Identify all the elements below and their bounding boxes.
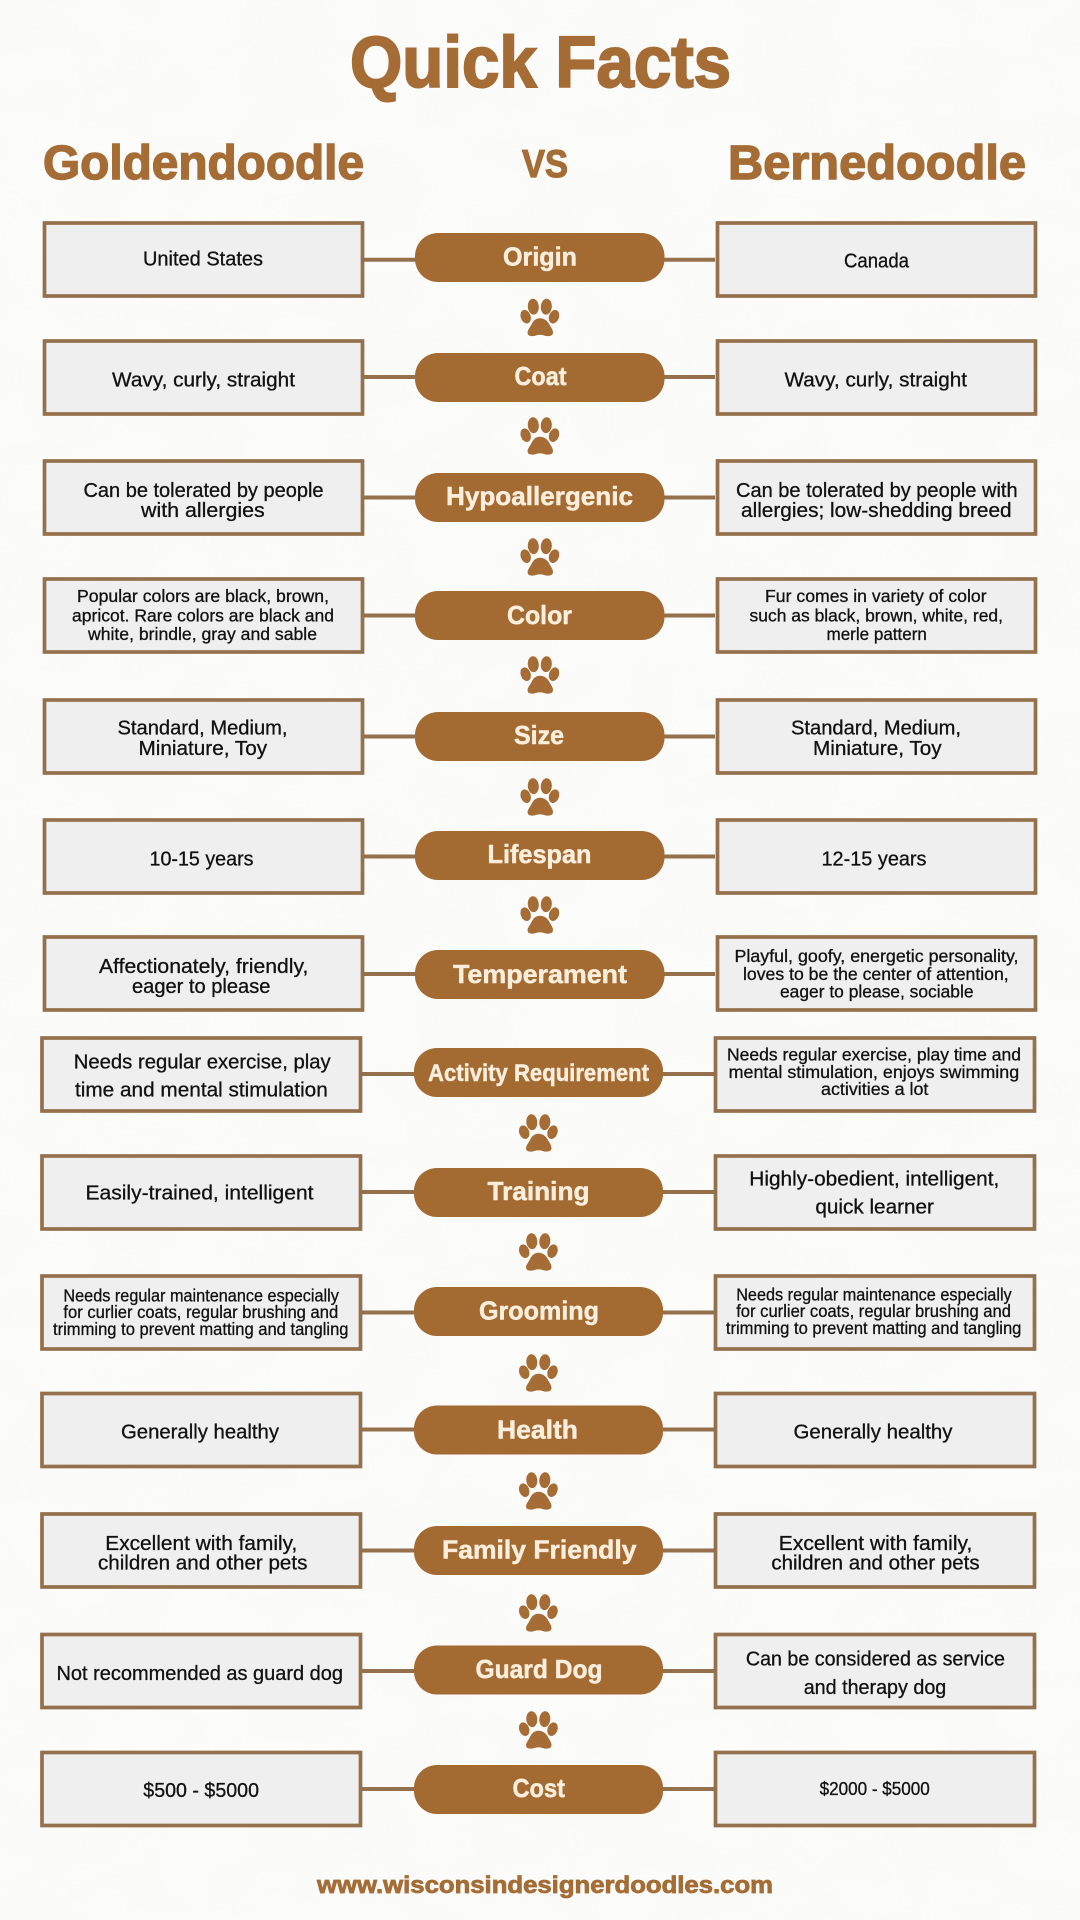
- Coat connectors: [364, 375, 715, 379]
- Health Goldendoodle text: Generally healthy: [121, 1420, 280, 1444]
- Health label: Health: [497, 1414, 578, 1444]
- Guard Bernedoodle text: [746, 1647, 1005, 1699]
- Family Goldendoodle text: [98, 1532, 307, 1574]
- Grooming pill: [414, 1287, 663, 1336]
- row: Training: [42, 1156, 1034, 1229]
- row: Lifespan: [44, 820, 1036, 893]
- Guard connectors: [362, 1669, 714, 1673]
- Color label: Color: [507, 600, 572, 630]
- Temperament Bernedoodle text: [734, 946, 1018, 1002]
- Family Bernedoodle box: [716, 1514, 1034, 1587]
- Size label: Size: [514, 720, 564, 750]
- Grooming Bernedoodle text: Needs regular maintenance especially: [736, 1284, 1012, 1304]
- icon: paw: [517, 1114, 560, 1152]
- icon: paw: [517, 1711, 560, 1749]
- Hypoallergenic Goldendoodle text: Can be tolerated by people: [84, 479, 324, 502]
- Hypoallergenic Bernedoodle text: allergies; low-shedding breed: [741, 499, 1012, 522]
- icon: paw: [517, 1354, 560, 1392]
- Color Goldendoodle box: [44, 579, 362, 652]
- icon: paw: [519, 298, 561, 336]
- row: Cost: [42, 1752, 1034, 1826]
- Training Bernedoodle text: [749, 1168, 999, 1218]
- Grooming Bernedoodle text: [726, 1284, 1021, 1338]
- icon: paw: [519, 417, 561, 455]
- Training connectors: [362, 1190, 714, 1194]
- icon: paw: [517, 1233, 560, 1271]
- Guard Goldendoodle text: Not recommended as guard dog: [56, 1662, 343, 1685]
- Grooming Bernedoodle text: for curlier coats, regular brushing and: [736, 1301, 1011, 1321]
- Grooming Bernedoodle box: [716, 1276, 1034, 1349]
- Size Bernedoodle text: Miniature, Toy: [813, 737, 942, 760]
- Cost label: Cost: [512, 1773, 565, 1803]
- Activity Bernedoodle text: Needs regular exercise, play time and: [727, 1045, 1021, 1065]
- row: Hypoallergenic: [44, 461, 1036, 534]
- Activity Goldendoodle box: [42, 1038, 360, 1111]
- Color Bernedoodle text: [750, 586, 1003, 644]
- Temperament Goldendoodle text: eager to please: [132, 975, 270, 998]
- Family Bernedoodle text: [771, 1532, 980, 1574]
- Cost pill: [414, 1765, 663, 1814]
- Color Goldendoodle text: Popular colors are black, brown,: [77, 586, 329, 606]
- Activity Bernedoodle text: mental stimulation, enjoys swimming: [729, 1062, 1019, 1082]
- Health Goldendoodle box: [42, 1394, 360, 1466]
- Size Goldendoodle box: [44, 700, 362, 773]
- Hypoallergenic pill: [415, 473, 664, 522]
- Size Bernedoodle box: [718, 700, 1036, 773]
- Lifespan Bernedoodle box: [718, 820, 1036, 893]
- icon: paw: [519, 896, 561, 934]
- Lifespan Bernedoodle text: 12-15 years: [822, 848, 926, 870]
- Health Bernedoodle box: [716, 1394, 1034, 1466]
- Cost Bernedoodle text: $2000 - $5000: [820, 1779, 930, 1799]
- Temperament Bernedoodle text: eager to please, sociable: [780, 982, 974, 1002]
- Family label: Family Friendly: [442, 1534, 637, 1564]
- Origin pill: [415, 233, 664, 282]
- Guard Bernedoodle text: and therapy dog: [804, 1676, 946, 1699]
- Family Goldendoodle text: Excellent with family,: [105, 1532, 297, 1555]
- Color Goldendoodle text: white, brindle, gray and sable: [87, 624, 317, 644]
- Activity Bernedoodle text: [727, 1045, 1021, 1099]
- icon: paw: [517, 1594, 560, 1632]
- Size pill: [415, 712, 664, 761]
- Temperament label: Temperament: [453, 959, 627, 989]
- Coat Bernedoodle text: Wavy, curly, straight: [784, 368, 967, 392]
- Activity connectors: [362, 1072, 714, 1076]
- title: Quick Facts: [350, 23, 731, 103]
- Cost connectors: [362, 1787, 714, 1791]
- Lifespan Goldendoodle text: 10-15 years: [150, 848, 254, 870]
- Lifespan connectors: [364, 854, 715, 858]
- Guard Goldendoodle box: [42, 1634, 360, 1708]
- Color pill: [415, 591, 664, 640]
- heading: Bernedoodle: Bernedoodle: [728, 137, 1026, 190]
- Origin Bernedoodle text: Canada: [844, 250, 910, 272]
- Family Bernedoodle text: Excellent with family,: [779, 1532, 972, 1555]
- row: Coat: [44, 341, 1036, 414]
- Origin label: Origin: [503, 242, 577, 272]
- Grooming Goldendoodle text: [53, 1285, 348, 1339]
- Training Goldendoodle box: [42, 1156, 360, 1229]
- Guard pill: [414, 1646, 663, 1694]
- Hypoallergenic connectors: [364, 496, 715, 500]
- Grooming Goldendoodle text: trimming to prevent matting and tangling: [53, 1319, 348, 1339]
- icon: paw: [519, 778, 561, 816]
- Size Goldendoodle text: Standard, Medium,: [118, 716, 288, 740]
- Activity label: Activity Requirement: [428, 1060, 649, 1087]
- row: Temperament: [44, 937, 1036, 1010]
- Temperament Bernedoodle text: Playful, goofy, energetic personality,: [734, 946, 1018, 966]
- Temperament Bernedoodle box: [718, 937, 1036, 1010]
- Temperament pill: [415, 950, 664, 999]
- Size Bernedoodle text: Standard, Medium,: [791, 716, 961, 740]
- Cost Goldendoodle text: $500 - $5000: [143, 1779, 259, 1802]
- Training Bernedoodle box: [716, 1156, 1034, 1229]
- Guard Bernedoodle text: Can be considered as service: [746, 1647, 1005, 1670]
- Grooming Goldendoodle box: [42, 1276, 360, 1349]
- Grooming connectors: [362, 1310, 714, 1314]
- Health Bernedoodle text: Generally healthy: [794, 1420, 953, 1444]
- heading: Goldendoodle: Goldendoodle: [43, 137, 364, 190]
- heading: vs: VS: [522, 143, 568, 186]
- Training Goldendoodle text: Easily-trained, intelligent: [86, 1181, 314, 1204]
- Grooming Goldendoodle text: for curlier coats, regular brushing and: [63, 1302, 338, 1322]
- Activity Goldendoodle text: Needs regular exercise, play: [74, 1051, 331, 1074]
- Grooming Bernedoodle text: trimming to prevent matting and tangling: [726, 1318, 1021, 1338]
- Activity Goldendoodle text: time and mental stimulation: [75, 1079, 328, 1102]
- Color Goldendoodle text: apricot. Rare colors are black and: [72, 606, 334, 626]
- Hypoallergenic label: Hypoallergenic: [446, 481, 633, 511]
- Hypoallergenic Bernedoodle box: [718, 461, 1036, 534]
- Activity Bernedoodle text: activities a lot: [821, 1079, 929, 1099]
- icon: paw: [517, 1472, 560, 1510]
- Coat Goldendoodle box: [44, 341, 362, 414]
- Grooming Goldendoodle text: Needs regular maintenance especially: [63, 1285, 339, 1305]
- Temperament Goldendoodle box: [44, 937, 362, 1010]
- Color Goldendoodle text: [72, 586, 334, 644]
- footer website: www.wisconsindesignerdoodles.com: [316, 1872, 773, 1899]
- Color Bernedoodle box: [718, 579, 1036, 652]
- row: Grooming: [42, 1276, 1034, 1349]
- Health pill: [414, 1406, 663, 1454]
- Grooming label: Grooming: [479, 1296, 599, 1326]
- Activity Bernedoodle box: [716, 1038, 1034, 1111]
- Hypoallergenic Goldendoodle text: [84, 479, 324, 522]
- Origin Goldendoodle text: United States: [143, 248, 263, 270]
- Size Goldendoodle text: [118, 716, 288, 760]
- Hypoallergenic Bernedoodle text: [736, 479, 1018, 522]
- Origin connectors: [364, 258, 715, 262]
- row: Health: [42, 1394, 1034, 1466]
- Coat label: Coat: [514, 361, 567, 391]
- Guard Bernedoodle box: [716, 1634, 1034, 1708]
- Lifespan Goldendoodle box: [44, 820, 362, 893]
- Activity pill: [414, 1048, 663, 1097]
- Training pill: [414, 1168, 663, 1217]
- Coat Goldendoodle text: Wavy, curly, straight: [112, 368, 295, 392]
- Temperament Goldendoodle text: [99, 955, 308, 998]
- icon: paw: [519, 656, 561, 694]
- Lifespan pill: [415, 831, 664, 880]
- Activity Goldendoodle text: [74, 1051, 331, 1102]
- row: Activity Requirement: [42, 1038, 1034, 1111]
- Health connectors: [362, 1428, 714, 1432]
- Color Bernedoodle text: such as black, brown, white, red,: [750, 606, 1003, 626]
- Family connectors: [362, 1548, 714, 1552]
- Training label: Training: [488, 1176, 590, 1206]
- Color Bernedoodle text: merle pattern: [826, 624, 927, 644]
- Guard label: Guard Dog: [476, 1654, 602, 1684]
- Size Goldendoodle text: Miniature, Toy: [138, 737, 268, 760]
- Lifespan label: Lifespan: [488, 839, 592, 869]
- Family Goldendoodle box: [42, 1514, 360, 1587]
- Hypoallergenic Goldendoodle box: [44, 461, 362, 534]
- Family Bernedoodle text: children and other pets: [771, 1552, 980, 1574]
- Temperament Bernedoodle text: loves to be the center of attention,: [743, 964, 1009, 984]
- Family pill: [414, 1526, 663, 1575]
- row: Origin: [44, 223, 1036, 296]
- Cost Goldendoodle box: [42, 1752, 360, 1826]
- Family Goldendoodle text: children and other pets: [98, 1552, 307, 1574]
- Training Bernedoodle text: quick learner: [815, 1195, 934, 1218]
- row: Color: [44, 579, 1036, 652]
- Hypoallergenic Goldendoodle text: with allergies: [140, 499, 265, 522]
- Coat Bernedoodle box: [718, 341, 1036, 414]
- Cost Bernedoodle box: [716, 1752, 1034, 1826]
- row: Size: [44, 700, 1036, 773]
- Size Bernedoodle text: [791, 716, 961, 760]
- Color Bernedoodle text: Fur comes in variety of color: [765, 586, 987, 606]
- Origin Goldendoodle box: [44, 223, 362, 296]
- Size connectors: [364, 734, 715, 738]
- Origin Bernedoodle box: [718, 223, 1036, 296]
- row: Guard Dog: [42, 1634, 1034, 1708]
- row: Family Friendly: [42, 1514, 1034, 1587]
- icon: paw: [519, 538, 561, 576]
- Color connectors: [364, 614, 715, 618]
- Hypoallergenic Bernedoodle text: Can be tolerated by people with: [736, 479, 1018, 502]
- Temperament connectors: [364, 972, 715, 976]
- Coat pill: [415, 353, 664, 402]
- Temperament Goldendoodle text: Affectionately, friendly,: [99, 955, 308, 978]
- Training Bernedoodle text: Highly-obedient, intelligent,: [749, 1168, 999, 1191]
